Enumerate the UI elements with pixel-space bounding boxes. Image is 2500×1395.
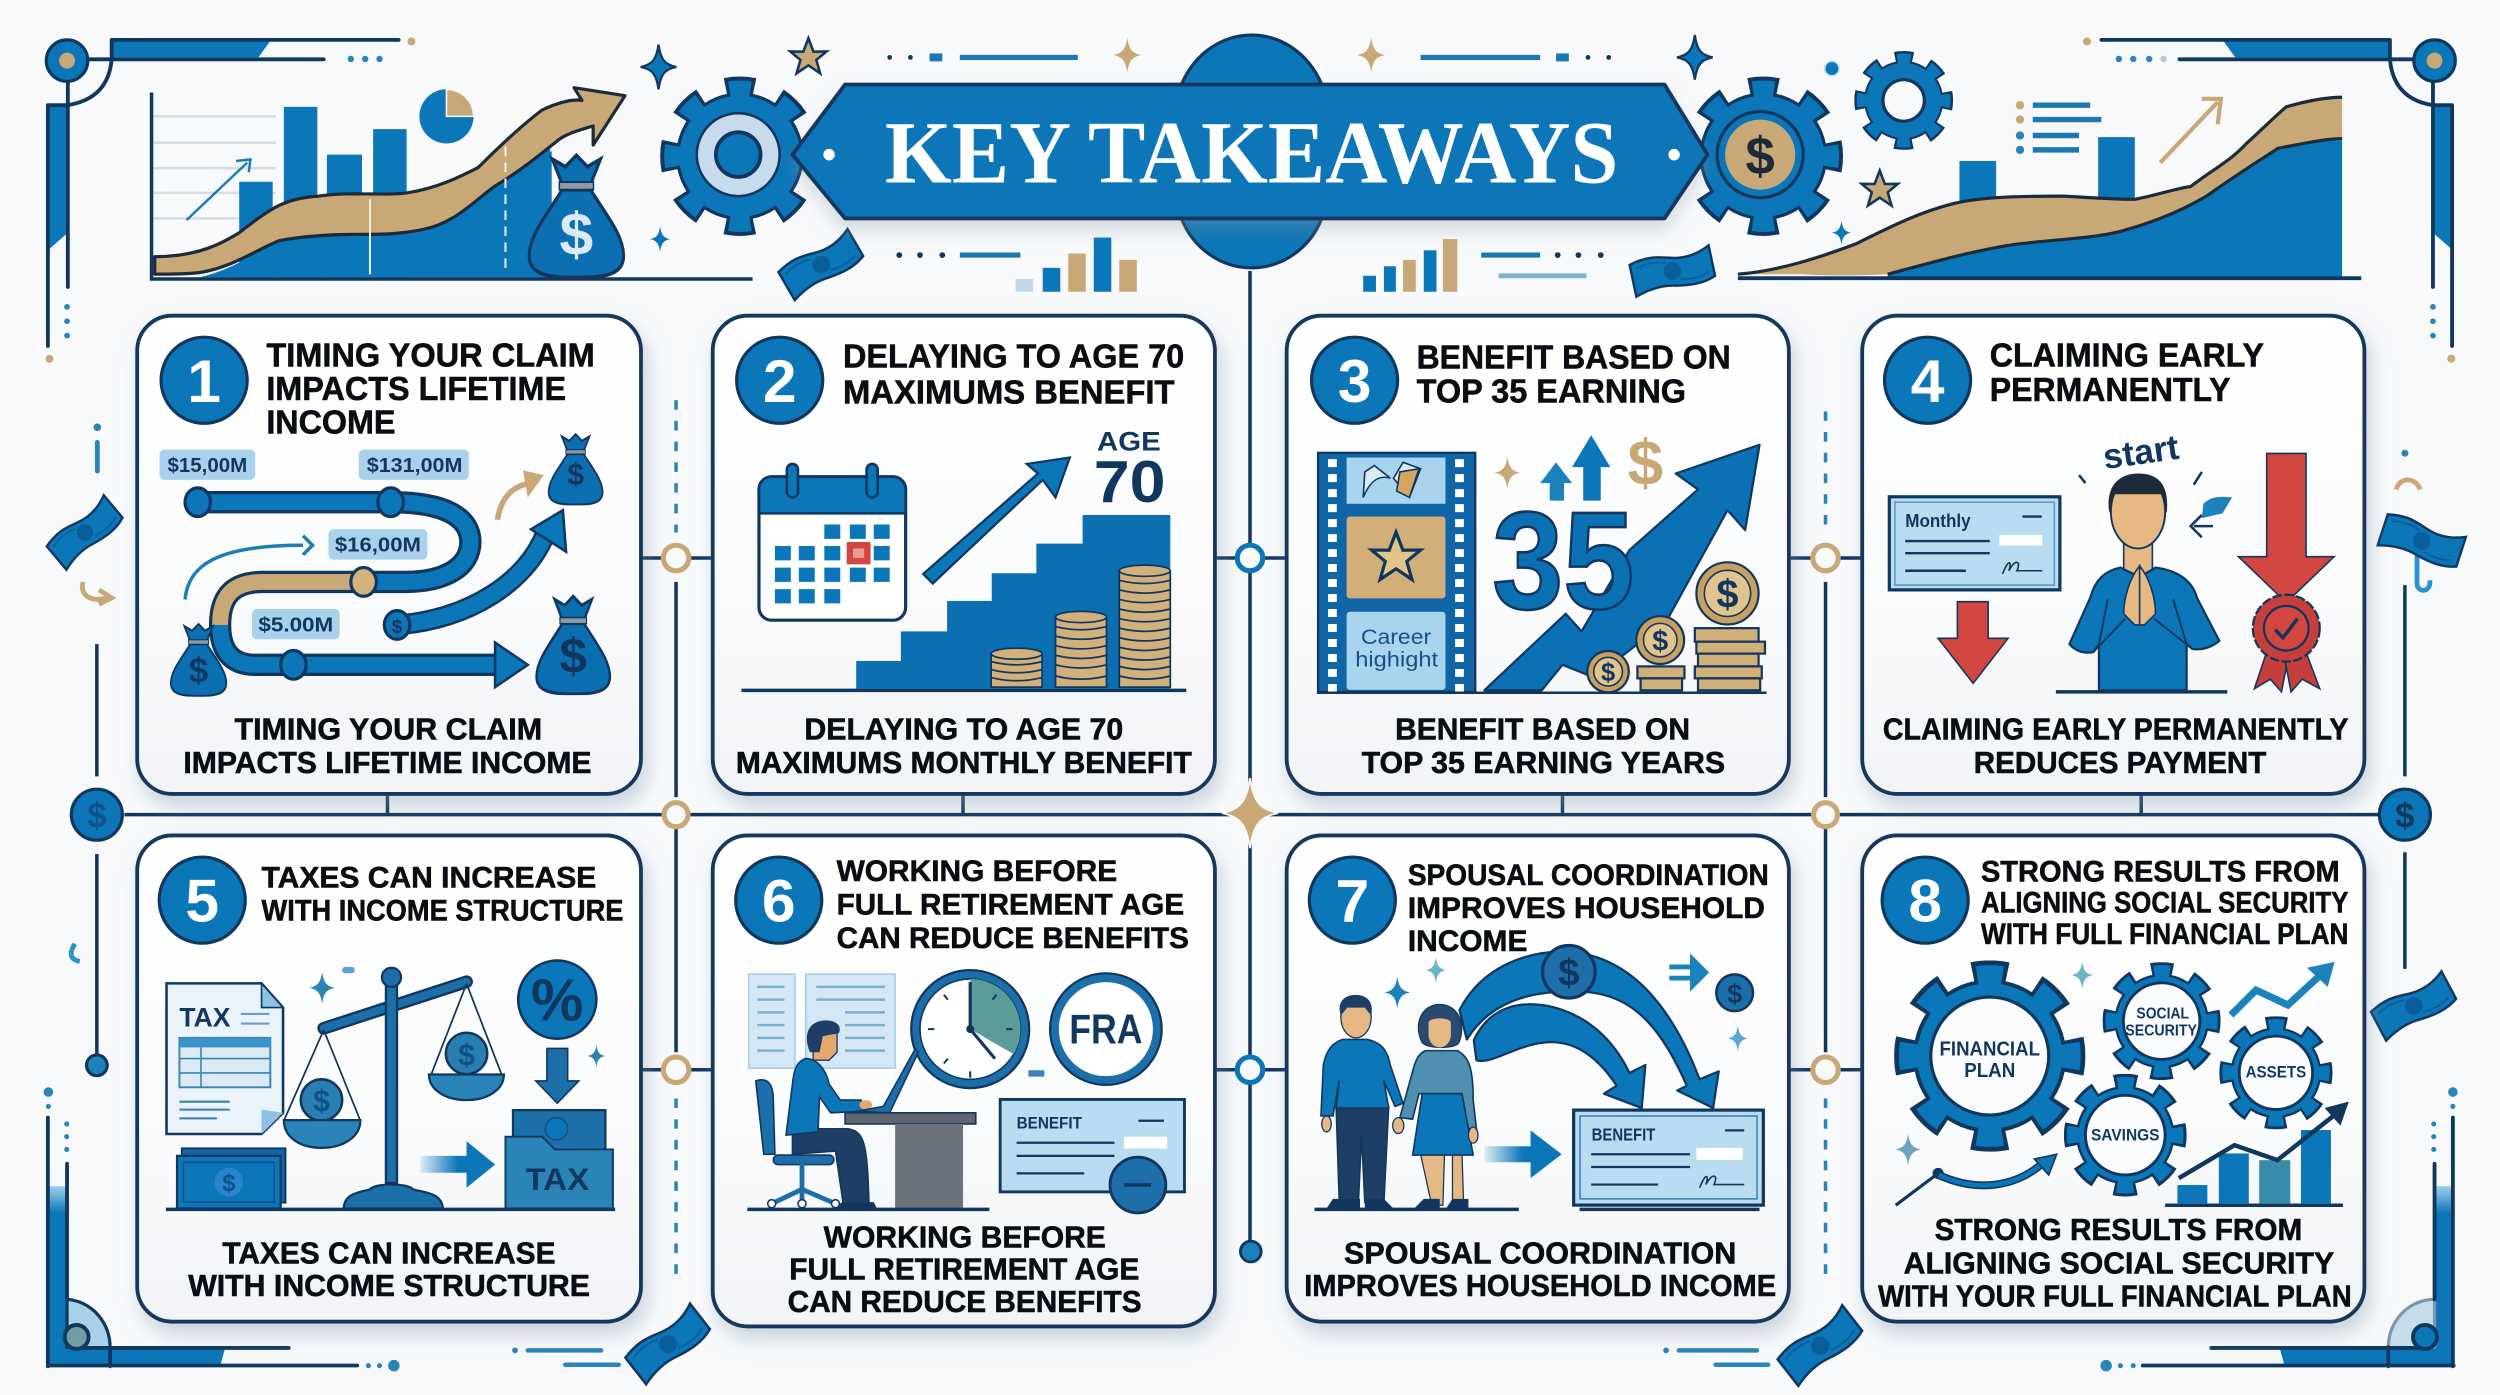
caption: BENEFIT BASED ON [1395, 714, 1690, 747]
chart: mini bars left of centre [1016, 238, 1137, 292]
panel 3: top 35 earning years [1287, 316, 1789, 794]
illustration: balance scale: $ [458, 1039, 475, 1072]
caption: DELAYING TO AGE 70 [804, 714, 1123, 747]
illustration: stairs [856, 515, 1170, 689]
heading: BENEFIT BASED ON [1417, 339, 1731, 376]
coin dollar signs: $ [1716, 572, 1739, 616]
arrow: up to age 70 [923, 458, 1070, 584]
heading: WITH INCOME STRUCTURE [262, 895, 623, 928]
illustration: savings gear: SAVINGS [2091, 1126, 2160, 1145]
illustration: income paths: $ [189, 651, 208, 690]
illustration: gold coins [1587, 562, 1765, 692]
illustration: balance scale [284, 968, 504, 1208]
icon: award rosette [2253, 595, 2320, 692]
heading: STRONG RESULTS FROM [1981, 856, 2340, 889]
illustration: balance scale: $ [313, 1085, 330, 1118]
icon: list lines [2016, 101, 2101, 154]
caption: IMPACTS LIFETIME INCOME [183, 747, 592, 780]
illustration: assets gear [2228, 1025, 2323, 1120]
coin dollar signs: $ [1601, 659, 1615, 687]
heading: ALIGNING SOCIAL SECURITY [1981, 887, 2349, 920]
caption: ALIGNING SOCIAL SECURITY [1904, 1247, 2334, 1280]
heading: CLAIMING EARLY [1990, 338, 2264, 375]
caption [736, 714, 1192, 780]
illustration: financial plan gear: FINANCIAL [1940, 1037, 2040, 1060]
coin dollar signs [1601, 572, 1739, 687]
caption: WITH INCOME STRUCTURE [188, 1270, 590, 1303]
icon: dollar coins: $ [1727, 978, 1742, 1009]
illustration: benefit check [1574, 1110, 1763, 1205]
icon: small gear [1862, 59, 1945, 142]
number badge [1882, 857, 1968, 943]
heading [1990, 338, 2264, 409]
heading [837, 855, 1189, 955]
icon: dollar coin left [71, 789, 122, 840]
illustration: calendar [759, 464, 906, 620]
icon: dollar coins: $ [1558, 951, 1579, 994]
small up arrows and dollar: $ [1628, 427, 1663, 499]
heading: IMPACTS LIFETIME [266, 371, 566, 408]
illustration: film strip of earning years [1318, 453, 1475, 692]
small sparkles [309, 967, 605, 1067]
caption [1878, 1214, 2352, 1314]
caption: TIMING YOUR CLAIM [234, 714, 542, 747]
icon: cash stack [177, 1148, 285, 1208]
illustration: monthly check: Monthly [1905, 510, 1971, 531]
connector lines and nodes [71, 271, 2430, 1274]
heading: TIMING YOUR CLAIM [266, 338, 595, 375]
big number 35: 35 [1492, 483, 1634, 638]
illustration: benefit check: BENEFIT [1592, 1125, 1656, 1145]
frame corner: top left [46, 37, 415, 363]
heading: CAN REDUCE BENEFITS [837, 922, 1189, 955]
man [1321, 995, 1403, 1208]
caption [1362, 714, 1725, 780]
number badge: 2 [763, 347, 797, 415]
illustration: financial plan gear: PLAN [1964, 1059, 2015, 1082]
pipes [195, 502, 497, 665]
value labels: $15,00M [167, 455, 247, 477]
money bags [549, 434, 603, 505]
number badge: 8 [1908, 866, 1942, 934]
rising arrow [399, 534, 545, 625]
card frame [1862, 835, 2364, 1322]
decorative header stars and dashes [641, 35, 1898, 276]
heading: PERMANENTLY [1990, 372, 2230, 409]
value labels [160, 450, 469, 639]
heading: TOP 35 EARNING [1417, 374, 1686, 411]
value labels: $16,00M [335, 535, 421, 557]
caption [1304, 1237, 1776, 1303]
caption: WORKING BEFORE [824, 1221, 1106, 1254]
illustration: tax form: TAX [179, 1002, 230, 1033]
illustration: open handbook [749, 974, 895, 1068]
illustration: savings gear [2074, 1084, 2177, 1187]
frame corner: bottom right [1663, 1087, 2458, 1371]
number badge: 1 [187, 347, 221, 415]
illustration: film strip of earning years: Career [1361, 625, 1431, 649]
icon: gear right of banner with dollar: $ [1746, 127, 1775, 186]
caption [1883, 714, 2348, 780]
heading [1981, 856, 2349, 951]
card frame [713, 316, 1215, 794]
card frame [713, 835, 1215, 1326]
icon: gear left of banner [673, 89, 807, 223]
icon: percent circle: % [531, 968, 584, 1033]
age label [1094, 426, 1166, 515]
number badge: 4 [1911, 347, 1945, 415]
illustration: financial plan gear [1909, 976, 2070, 1136]
heading [266, 338, 595, 442]
illustration: income paths: $ [392, 617, 403, 638]
illustration: assets gear: ASSETS [2246, 1063, 2306, 1082]
caption: REDUCES PAYMENT [1974, 747, 2267, 780]
icon: tax folder: TAX [525, 1161, 589, 1197]
caption: FULL RETIREMENT AGE [789, 1253, 1139, 1286]
banner ribbon [792, 84, 1708, 218]
heading: IMPROVES HOUSEHOLD [1408, 892, 1765, 925]
caption: TAXES CAN INCREASE [222, 1237, 556, 1270]
caption: STRONG RESULTS FROM [1935, 1214, 2302, 1247]
illustration: film strip of earning years: highight [1355, 647, 1438, 671]
heading: SPOUSAL COORDINATION [1408, 859, 1769, 892]
panel 5: taxes [137, 835, 641, 1322]
heading [843, 339, 1184, 411]
chart: header left growth chart [152, 88, 753, 279]
illustration: person working at desk [756, 1020, 976, 1208]
icon: dollar coin right [2379, 789, 2430, 840]
value labels: $5.00M [258, 614, 333, 636]
caption [183, 714, 592, 780]
heading: DELAYING TO AGE 70 [843, 339, 1184, 376]
chart: header right growth chart [1738, 97, 2361, 278]
panel 4: claiming early [1862, 316, 2364, 794]
chart: mini bars right of centre [1363, 239, 1457, 292]
coin dollar signs: $ [1652, 625, 1668, 657]
start label: start [2101, 428, 2182, 477]
arrow: small red down [1938, 602, 2008, 683]
arrow: lower left rising [1896, 1154, 2057, 1205]
caption: MAXIMUMS MONTHLY BENEFIT [736, 747, 1192, 780]
card frame [1287, 316, 1789, 794]
illustration: social security gear: SECURITY [2125, 1022, 2197, 1039]
icon: percent circle [518, 961, 596, 1039]
arrow: to tax folder [420, 1141, 495, 1188]
number badge [1309, 857, 1395, 943]
icon: dollar coins [1543, 945, 1753, 1011]
icon: FRA badge: FRA [1069, 1005, 1143, 1052]
panel 7: spousal coordination [1287, 835, 1789, 1322]
number badge [736, 857, 822, 943]
panel 2: delaying to age 70 [713, 316, 1215, 794]
number badge [161, 337, 247, 423]
number badge: 7 [1336, 866, 1369, 934]
arrow: big zigzag growth [1484, 445, 1760, 690]
icon: dollar coin left: $ [87, 796, 107, 835]
number badge [1885, 337, 1971, 423]
caption: CLAIMING EARLY PERMANENTLY [1883, 714, 2348, 747]
heading: FULL RETIREMENT AGE [837, 888, 1184, 921]
caption: SPOUSAL COORDINATION [1344, 1237, 1736, 1270]
caption [188, 1237, 590, 1303]
illustration: worried person [2056, 472, 2232, 692]
banner medallion [1181, 35, 1322, 268]
illustration: social security gear: SOCIAL [2136, 1006, 2189, 1023]
icon: clock [911, 970, 1029, 1088]
number badge [1312, 337, 1398, 423]
heading [1417, 339, 1731, 411]
icon: dollar coin right: $ [2395, 796, 2415, 835]
heading [262, 862, 623, 928]
arrow: outer curved flow [1459, 952, 1719, 1108]
icon: cash stack: $ [222, 1170, 236, 1197]
number badge [737, 337, 823, 423]
heading: WITH FULL FINANCIAL PLAN [1981, 918, 2348, 951]
illustration: monthly check [1889, 497, 2060, 590]
icon: FRA badge [1028, 973, 1162, 1085]
caption: CAN REDUCE BENEFITS [788, 1286, 1142, 1319]
heading: INCOME [1408, 925, 1527, 958]
age label: AGE [1097, 426, 1161, 457]
title text: KEY TAKEAWAYS [885, 104, 1618, 203]
frame corner: bottom left [44, 1087, 619, 1371]
arrow: down into tax folder [536, 1048, 579, 1103]
illustration: couple [1321, 995, 1478, 1208]
icon: money bag: $ [560, 200, 593, 268]
small up arrows and dollar [1495, 427, 1663, 501]
arrow: to benefit check [1484, 1130, 1562, 1178]
number badge: 5 [185, 866, 219, 934]
number badge: 6 [762, 866, 796, 934]
frame corner: top right [2083, 37, 2455, 363]
caption: WITH YOUR FULL FINANCIAL PLAN [1878, 1281, 2352, 1314]
number badge: 3 [1338, 347, 1371, 415]
heading: WORKING BEFORE [837, 855, 1117, 888]
banner dots [823, 149, 1680, 160]
title banner [792, 35, 1708, 268]
panel 8: strong results [1862, 835, 2364, 1322]
caption: TOP 35 EARNING YEARS [1362, 747, 1725, 780]
heading: INCOME [266, 405, 395, 442]
icon: money bag [529, 155, 624, 278]
caption [788, 1221, 1142, 1319]
illustration: income paths: $ [559, 629, 587, 684]
illustration: coin stacks [991, 565, 1170, 687]
illustration: income paths: $ [567, 459, 584, 492]
value labels: $131,00M [367, 455, 462, 477]
panel 1: timing your claim [137, 316, 641, 794]
card frame [1287, 835, 1789, 1322]
illustration: benefit check with minus: BENEFIT [1017, 1113, 1083, 1132]
arrow: inner curved flow [1474, 1004, 1645, 1108]
chart: rising bars [2165, 1102, 2349, 1205]
heading: MAXIMUMS BENEFIT [843, 374, 1175, 411]
icon: gear right of banner with dollar [1696, 89, 1830, 223]
caption: IMPROVES HOUSEHOLD INCOME [1304, 1270, 1776, 1303]
arrow: top zigzag rising [2231, 962, 2335, 1015]
icon: tax folder [505, 1110, 613, 1208]
sparkles [1895, 962, 2093, 1165]
panel 6: working before full retirement age [713, 835, 1215, 1326]
woman [1393, 1004, 1478, 1208]
illustration: income paths [160, 434, 610, 696]
card frame [1862, 316, 2364, 794]
card frame [137, 316, 641, 794]
illustration: benefit check with minus [1000, 1099, 1184, 1213]
illustration: social security gear [2112, 972, 2211, 1071]
arrow: big red down [2238, 453, 2334, 603]
age label: 70 [1094, 450, 1166, 515]
card frame [137, 835, 641, 1322]
icon: pie chart [419, 89, 474, 143]
number badge [159, 857, 245, 943]
heading: TAXES CAN INCREASE [262, 862, 596, 895]
heading [1408, 859, 1769, 958]
sparkles and small arrow [1385, 953, 1748, 1051]
illustration: tax form [167, 983, 283, 1134]
